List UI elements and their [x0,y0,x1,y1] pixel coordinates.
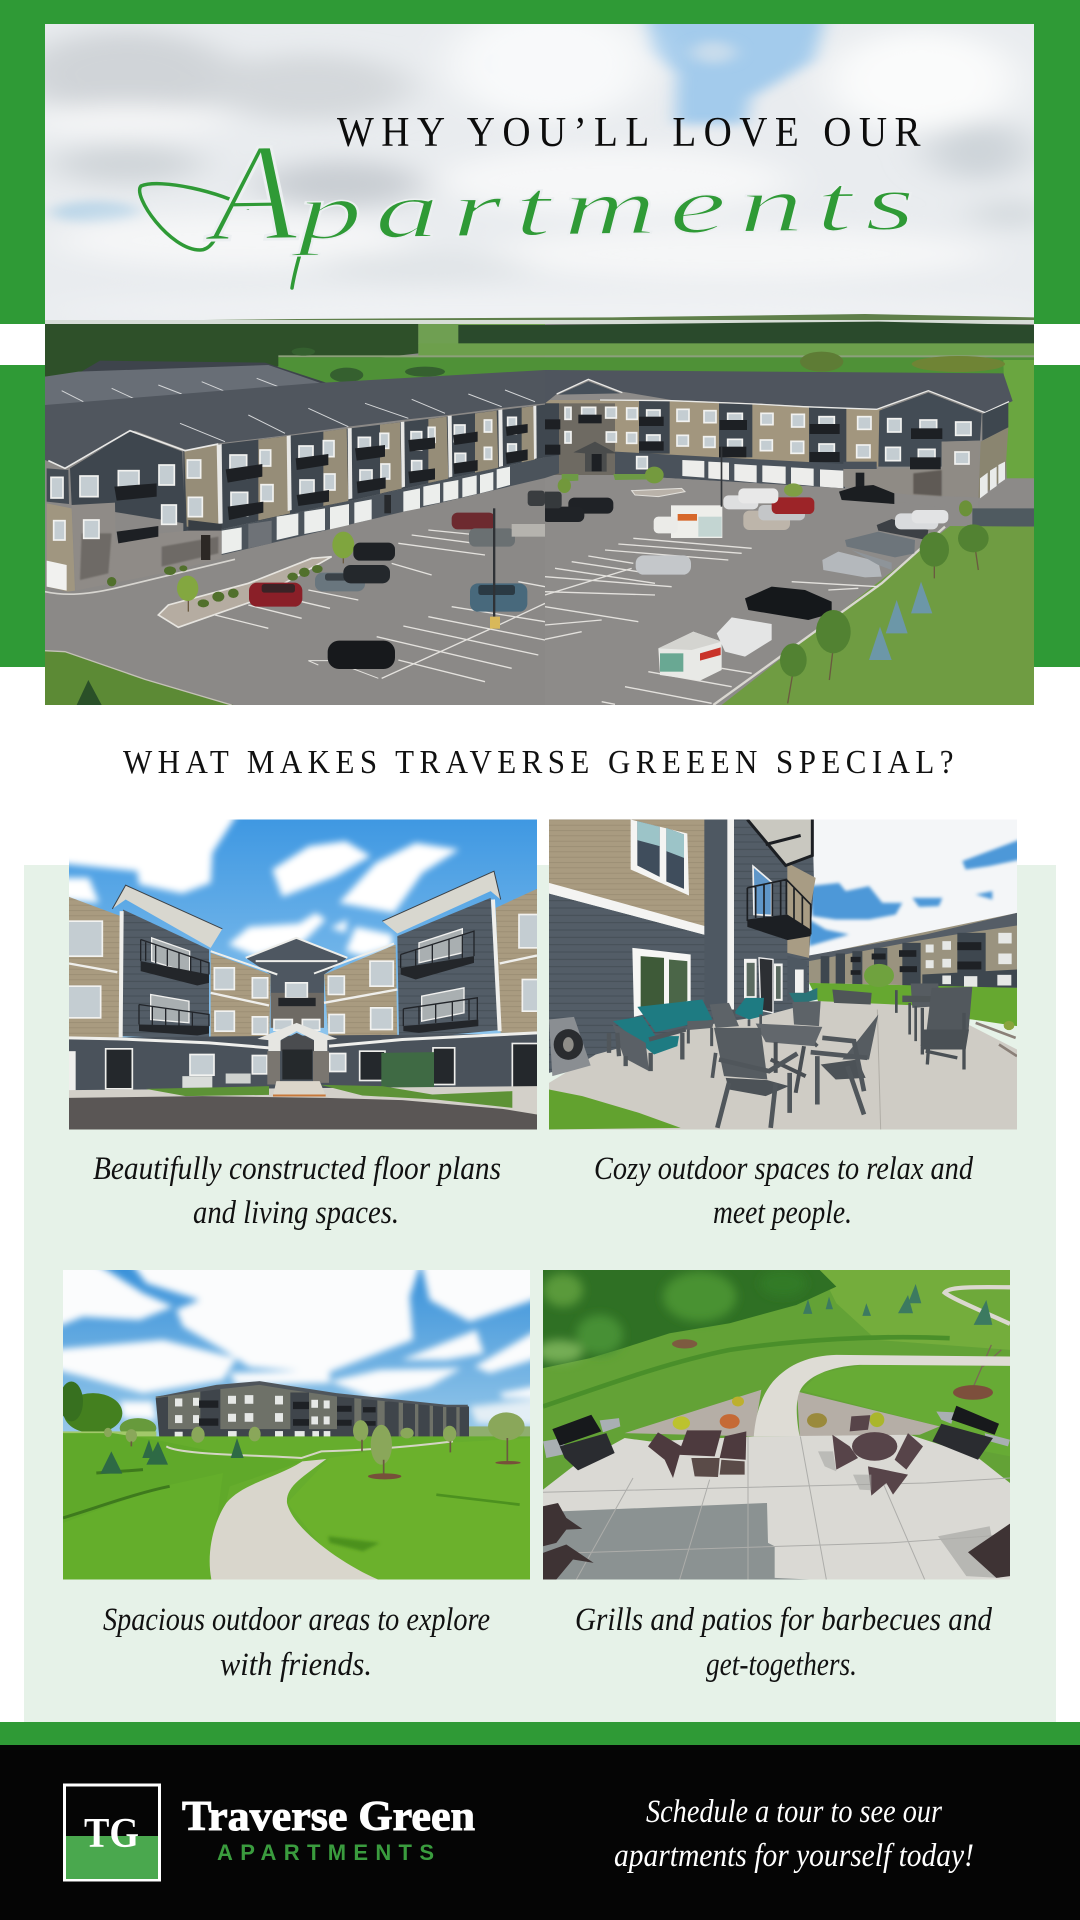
script title: A [202,115,299,271]
caption 1: and living spaces. [193,1195,399,1231]
distant building [155,1381,469,1442]
photo: patio seating [549,820,1017,1130]
west gable and stone [70,432,184,523]
green divider band [0,1722,1080,1745]
photo: grills and patio [543,1270,1010,1580]
script title: partments [289,159,928,257]
logo wordmark [182,1794,475,1865]
facade bays [183,405,545,533]
hero photo: aerial view of apartment complex [20,7,1054,705]
hero heading: WHY YOU’LL LOVE OUR [337,110,928,156]
patio floor and grass [549,1001,1017,1130]
script title [140,105,929,288]
photo: apartment entrance [69,820,537,1130]
footer panel [0,1745,1080,1920]
east lot vehicles [542,485,948,681]
dining set [710,1001,878,1128]
shrubs [673,1396,884,1430]
caption 4: get-togethers. [706,1647,857,1683]
caption 2: meet people. [713,1195,852,1231]
call to action: Schedule a tour to see our [646,1794,942,1830]
left grill [543,1415,620,1470]
east lot trees [558,467,989,703]
call to action: apartments for yourself today! [614,1838,974,1874]
shaded foreground chairs [543,1503,594,1580]
lower right of hero: building east wing, parking, lawn [545,320,1034,705]
logo mark: TG: TG [84,1811,139,1857]
garages [222,457,545,555]
caption 1: Beautifully constructed floor plans [93,1151,501,1187]
caption 3: with friends. [220,1647,372,1683]
section heading: WHAT MAKES TRAVERSE GREEEN SPECIAL? [123,744,959,781]
lawn [63,1436,530,1580]
logo wordmark: APARTMENTS [217,1840,434,1865]
lot surfaces [45,559,235,594]
lounge furniture [609,988,817,1071]
right grill [932,1406,1010,1460]
right table set [832,1415,923,1496]
west lot cars [249,491,545,669]
lawn and lot [545,475,950,705]
far seating [832,984,972,1070]
panel: light green background [24,865,1056,1722]
green frame bars behind hero [0,0,1080,667]
logo wordmark: Traverse Green [182,1794,475,1840]
caption 3: Spacious outdoor areas to explore [103,1602,490,1638]
caption 2: Cozy outdoor spaces to relax and [594,1151,973,1187]
photo: spacious lawn and building [63,1270,530,1580]
lower left of hero: building west wing and parking [45,320,545,705]
far tree line [60,1381,530,1445]
sky with clouds [45,24,1034,320]
logo mark: TG [64,1785,160,1880]
caption 4: Grills and patios for barbecues and [575,1602,992,1638]
main roof [45,370,545,468]
left table set [648,1430,746,1478]
east wing facade [545,400,882,467]
hose reel [549,1017,591,1076]
